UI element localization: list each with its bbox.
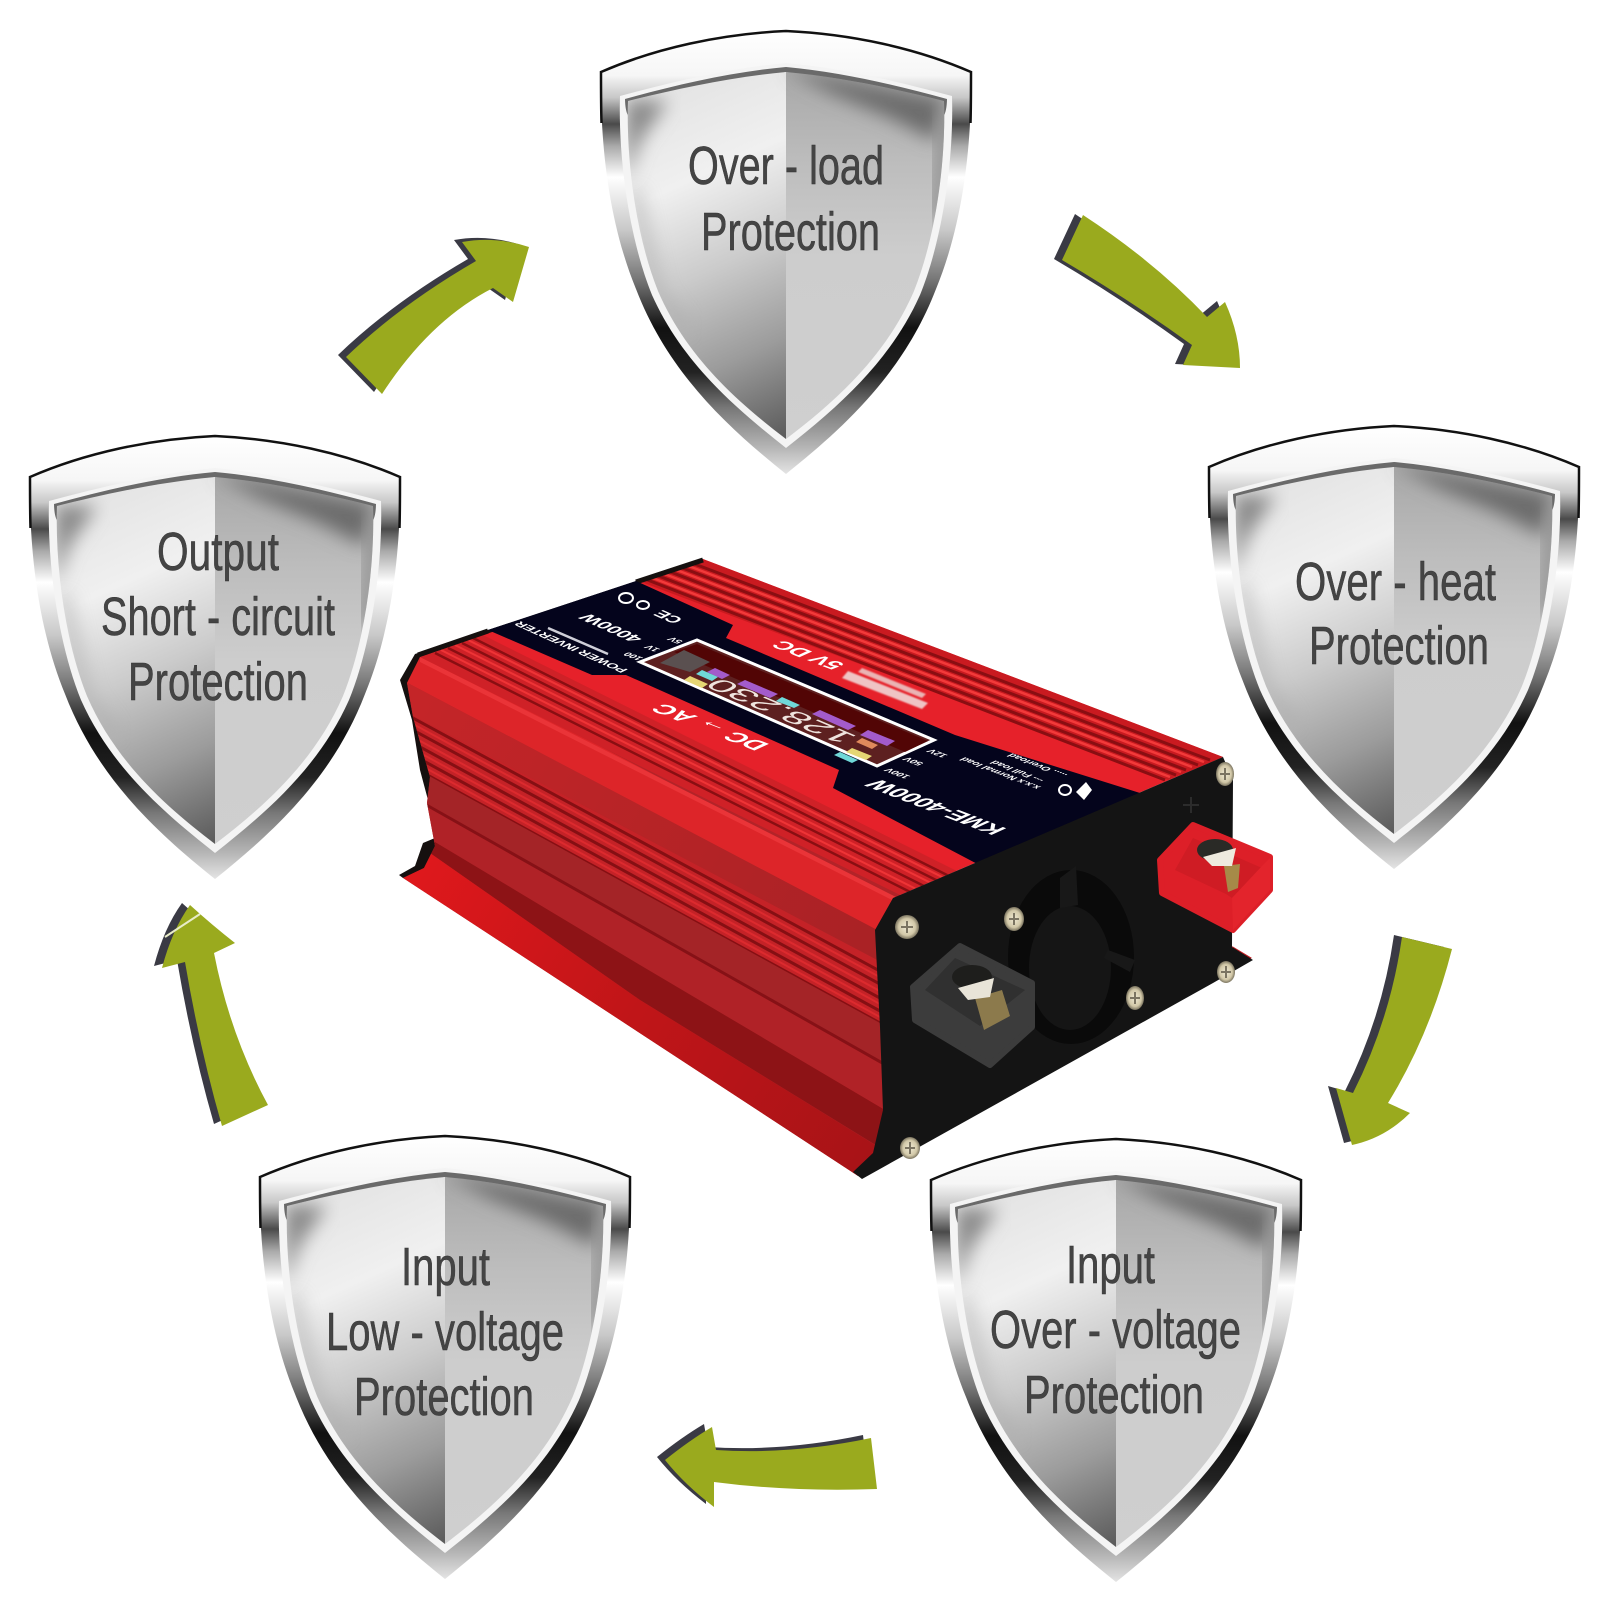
panel text: 4000W: 4000W — [574, 611, 647, 645]
inverter top surface — [418, 559, 1225, 902]
label: Output Short-circuit Protection — [101, 522, 335, 712]
label: Input Low-voltage Protection: Protection — [354, 1367, 534, 1427]
label: Output Short-circuit Protection: Short - circuit — [101, 587, 335, 647]
panel text: ratings list: ..... Overload — [1005, 752, 1071, 778]
shield: Input Over-voltage Protection — [931, 1139, 1301, 1582]
panel text: 5V DC: 5V DC — [766, 638, 850, 672]
panel text: website line — [548, 628, 608, 654]
label: Input Over-voltage Protection: Over - voltage — [990, 1300, 1241, 1360]
back edge of top surface — [418, 560, 703, 655]
black label panel — [488, 581, 1140, 868]
logo on red strip — [842, 668, 928, 709]
side band: shaded — [407, 682, 876, 960]
LCD display — [640, 640, 934, 766]
label: Over-load Protection: Protection — [701, 202, 880, 262]
negative black terminal — [913, 946, 1032, 1065]
arrow: output short-circuit to over-load — [338, 238, 529, 394]
shield: Input Low-voltage Protection — [260, 1136, 630, 1579]
power inverter product — [399, 559, 1270, 1179]
label: Input Over-voltage Protection: Protection — [1024, 1365, 1204, 1425]
label: Over-load Protection: Over - load — [688, 136, 884, 196]
label: Input Over-voltage Protection — [990, 1235, 1241, 1425]
panel text: ratings list: x.x.x Normal load — [957, 756, 1044, 790]
icons: certification marks — [619, 593, 649, 609]
label: Over-heat Protection — [1295, 552, 1496, 676]
panel text: ratings list: 5V — [665, 635, 686, 644]
panel text: ratings list: 50V — [900, 755, 927, 766]
arrow: input over-voltage to input low-voltage — [657, 1424, 877, 1507]
panel text: DC to AC: DC → AC — [645, 701, 775, 753]
side fins — [412, 716, 880, 1021]
panel text: ratings list: 1V — [642, 643, 663, 652]
side band: bright upper — [407, 657, 892, 929]
LCD display: 128.230 — [699, 675, 864, 747]
arrow: input low-voltage to output short-circuit — [154, 903, 268, 1126]
panel text: ratings list — [621, 635, 1071, 790]
plus symbol — [1183, 797, 1199, 813]
side lower band — [427, 776, 881, 1060]
panel text: ratings list: 100V — [882, 766, 913, 779]
panel text: CE mark: CE — [650, 608, 687, 625]
shield: Output Short-circuit Protection — [30, 436, 400, 879]
panel text: POWER INVERTER: POWER INVERTER — [511, 619, 631, 674]
label: Output Short-circuit Protection: Output — [157, 522, 279, 582]
foot shadow band — [430, 842, 900, 1160]
foot flange — [403, 853, 880, 1176]
label: Over-heat Protection: Protection — [1309, 616, 1489, 676]
panel text: ratings list: --- Full load — [988, 759, 1048, 783]
panel text: KME-4000W: KME-4000W — [859, 776, 1012, 837]
label: Over-heat Protection: Over - heat — [1295, 552, 1496, 612]
icon: speaker and arrow — [1059, 782, 1092, 800]
positive red terminal — [1160, 825, 1270, 930]
inverter side with heat-sink fins — [400, 641, 900, 1176]
shield: Over-heat Protection — [1209, 426, 1579, 869]
panel text: ratings list: 12V — [924, 747, 951, 758]
cooling fan — [1008, 866, 1135, 1044]
screws — [895, 762, 1235, 1159]
panel text: ratings list: 100 — [621, 651, 646, 661]
label: Over-load Protection — [688, 136, 884, 262]
label: Input Over-voltage Protection: Input — [1066, 1235, 1155, 1295]
label: Input Low-voltage Protection: Low - voltage — [326, 1302, 564, 1362]
shield: Over-load Protection — [601, 31, 971, 474]
inverter back plate silhouette — [399, 559, 703, 878]
label: Output Short-circuit Protection: Protection — [128, 652, 308, 712]
inverter black face plate — [853, 757, 1270, 1179]
label: Input Low-voltage Protection: Input — [401, 1237, 490, 1297]
label: Input Low-voltage Protection — [326, 1237, 564, 1427]
arrow: over-heat to input over-voltage — [1328, 935, 1452, 1145]
arrow: over-load to over-heat — [1054, 214, 1240, 368]
small red foot glimpse at far side — [1232, 946, 1252, 964]
